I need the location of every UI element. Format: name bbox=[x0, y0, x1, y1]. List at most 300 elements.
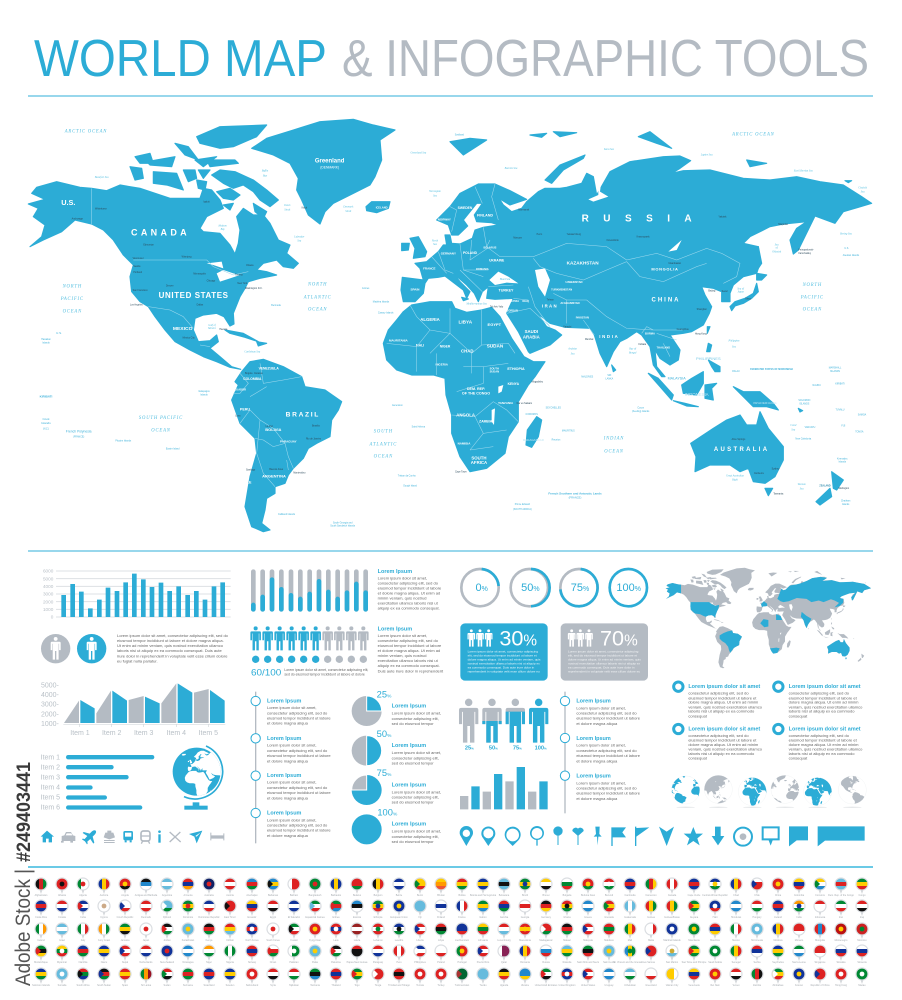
map borders and labels, Eurasia Africa Oceania: ISLANDS bbox=[799, 402, 810, 405]
flag row 5: Zambia bbox=[753, 984, 762, 987]
pie charts 25 50 75 100: 75% bbox=[377, 768, 392, 778]
timeline with three steps: Lorem Ipsum bbox=[576, 736, 611, 742]
timeline with four steps: consectetur adipiscing elit, sed do bbox=[267, 748, 328, 753]
four text items with ring bullets: consectetur adipiscing elit, sed do bbox=[789, 733, 850, 738]
area chart: Item 2 bbox=[102, 730, 121, 737]
flag row 1: Burkina Faso bbox=[581, 894, 596, 897]
flag row 1: Andorra bbox=[100, 894, 109, 897]
map country borders, Americas bbox=[92, 188, 302, 487]
flag row 1: Belgium bbox=[374, 894, 382, 897]
map borders and labels, Eurasia Africa Oceania: AFGHANISTAN bbox=[560, 301, 580, 305]
flag row 3: Mongolia bbox=[815, 939, 826, 942]
map labels, Americas: KIRIBATI bbox=[40, 394, 53, 398]
area chart: Item 1 bbox=[70, 730, 90, 737]
map borders and labels, Eurasia Africa Oceania: Tehran bbox=[547, 299, 554, 302]
flag row 5: Solomon Islands bbox=[32, 984, 51, 987]
map borders and labels, Eurasia Africa Oceania: Wellington bbox=[838, 487, 850, 490]
map labels, Americas: Islands bbox=[41, 421, 51, 425]
icon row: home car plane ship bus train info cutlery send bed bbox=[41, 830, 224, 844]
flag row 1: Australia bbox=[204, 894, 214, 897]
flag row 5: Macau bbox=[858, 984, 866, 987]
flag row 5: Syria bbox=[270, 984, 276, 987]
callout: 70 percent: Lorem ipsum dolor sit amet, consectetur adipiscing bbox=[568, 649, 639, 653]
flag row 5: Suriname bbox=[183, 984, 194, 987]
flag row 1: Barbados bbox=[331, 894, 342, 897]
map borders and labels, Eurasia Africa Oceania: AFRICA bbox=[471, 460, 488, 465]
timeline with three steps: Lorem Ipsum bbox=[576, 774, 611, 780]
map borders and labels, Eurasia Africa Oceania: NORWAY bbox=[438, 218, 451, 222]
map labels, Americas: Mexico bbox=[207, 327, 217, 330]
timeline with four steps: Lorem Ipsum bbox=[267, 698, 302, 704]
map borders and labels, Eurasia Africa Oceania: Reunion bbox=[552, 440, 561, 442]
text block: tube chart notes: aliquip ex ea commodo consequat. bbox=[378, 606, 440, 611]
map borders and labels, Eurasia Africa Oceania: North bbox=[431, 240, 439, 243]
flag row 5: Tunisia bbox=[416, 984, 424, 987]
map borders and labels, Eurasia Africa Oceania: Yakutsk bbox=[718, 215, 727, 218]
map borders and labels, Eurasia Africa Oceania: OF THE CONGO bbox=[462, 392, 490, 396]
flag row 5: Ukraine bbox=[521, 984, 530, 987]
flag row 5: Tajikistan bbox=[289, 984, 300, 987]
flag row 3: North Korea bbox=[246, 939, 259, 942]
flag row 3: Japan bbox=[143, 939, 150, 942]
flag row 3: Lesotho bbox=[395, 939, 404, 942]
flag row 1: Bahamas bbox=[268, 894, 279, 897]
map borders and labels, Eurasia Africa Oceania: Mogadishu bbox=[532, 382, 544, 384]
map borders and labels, Eurasia Africa Oceania: NORTH bbox=[802, 283, 822, 288]
map borders and labels, Eurasia Africa Oceania: FIJI bbox=[841, 426, 846, 428]
map labels, Americas: Lima bbox=[235, 416, 241, 418]
flag row 4: Russia bbox=[542, 961, 550, 964]
flag row 3: Kiribati bbox=[226, 939, 234, 942]
timeline with four steps: eiusmod tempor incididunt ut labore bbox=[267, 715, 331, 720]
flag row 3: Mali bbox=[628, 939, 633, 942]
map borders and labels, Eurasia Africa Oceania: ZAMBIA bbox=[479, 420, 493, 424]
map labels, Americas: Iqaluit bbox=[203, 200, 210, 203]
area chart: Item 3 bbox=[134, 730, 153, 737]
map labels, Americas: (DENMARK) bbox=[320, 166, 339, 170]
map labels, Americas: ARCTIC OCEAN bbox=[64, 129, 107, 134]
map borders and labels, Eurasia Africa Oceania: ANGOLA bbox=[456, 413, 476, 418]
map labels, Americas: COLOMBIA bbox=[243, 377, 262, 381]
map borders and labels, Eurasia Africa Oceania: MALDIVES bbox=[581, 375, 594, 378]
map labels, Americas: French Polynesia bbox=[66, 430, 92, 434]
horizontal bars bbox=[41, 754, 154, 812]
map labels, Americas: Saint Helena bbox=[412, 426, 426, 429]
map borders and labels, Eurasia Africa Oceania: Black Sea bbox=[500, 278, 511, 281]
map borders and labels, Eurasia Africa Oceania: French Southern and Antarctic Lands bbox=[548, 491, 602, 495]
four text items with ring bullets: veniam, quis nostrud exercitation ullamco bbox=[688, 747, 763, 752]
map labels, Americas: Whitehorse bbox=[95, 207, 107, 210]
people percentages: 75% bbox=[513, 746, 522, 752]
four text items with ring bullets: Lorem ipsum dolor sit amet bbox=[789, 726, 861, 732]
area chart: 5000- bbox=[41, 682, 60, 689]
four text items with ring bullets: laboris nisi ut aliquip ex ea commodo bbox=[789, 709, 855, 714]
map borders and labels, Eurasia Africa Oceania: Hong Kong bbox=[695, 333, 707, 335]
map labels, Americas: Vancouver bbox=[133, 257, 144, 260]
map borders and labels, Eurasia Africa Oceania: CHAD bbox=[461, 349, 474, 354]
map borders and labels, Eurasia Africa Oceania: INDONESIA bbox=[685, 392, 709, 397]
flag row 2: Germany bbox=[541, 916, 552, 919]
flag row 4: St. Vincent and the Grenadines bbox=[613, 961, 647, 964]
map borders and labels, Eurasia Africa Oceania: LANKA bbox=[606, 377, 614, 380]
text block: pictogram notes: Lorem Ipsum bbox=[378, 626, 412, 632]
map labels, Americas: Gough Island bbox=[403, 486, 418, 488]
map borders and labels, Eurasia Africa Oceania: Tasmania bbox=[773, 493, 784, 495]
map labels, Americas: Easter Island bbox=[166, 447, 180, 450]
flag row 2: Dominican Republic bbox=[198, 916, 220, 919]
map labels, Americas: U.S. bbox=[61, 198, 75, 207]
map borders and labels, Eurasia Africa Oceania: ISLANDS bbox=[830, 370, 840, 373]
text block: tube chart notes: Lorem ipsum dolor sit amet, bbox=[378, 576, 427, 581]
map borders and labels, Eurasia Africa Oceania: SUDAN bbox=[490, 370, 499, 374]
flag row 4: Norway bbox=[248, 961, 257, 964]
flag row 1: Benin bbox=[417, 894, 424, 897]
flag row 4 bbox=[34, 944, 869, 964]
callout: 30 percent: reprehenderit in voluptate velit esse cillum dolore eu bbox=[468, 669, 540, 673]
map borders and labels, Eurasia Africa Oceania: FEDERATED STATES OF MICRONESIA bbox=[750, 368, 793, 371]
map labels, Americas: Canary Islands bbox=[378, 311, 394, 314]
pie charts 25 50 75 100: sed do eiusmod tempor bbox=[392, 760, 434, 765]
flag row 3: Kenya bbox=[206, 939, 213, 942]
map labels, Americas: Beaufort Sea bbox=[95, 176, 109, 179]
flag row 2: Denmark bbox=[141, 916, 152, 919]
flag row 1: Austria bbox=[226, 894, 234, 897]
flag row 4: San Marino bbox=[666, 961, 679, 964]
flag row 2: India bbox=[796, 916, 802, 919]
map borders and labels, Eurasia Africa Oceania: Sea bbox=[861, 191, 865, 194]
map labels, Americas: VENEZUELA bbox=[259, 366, 279, 370]
flag row 1: Angola bbox=[121, 894, 129, 897]
map labels, Americas: MEXICO bbox=[173, 326, 193, 332]
flag row 5: Vatican City bbox=[666, 984, 679, 987]
pictogram people row 60/100 bbox=[250, 626, 369, 678]
flag row 3: Moldova bbox=[773, 939, 783, 942]
map borders and labels, Eurasia Africa Oceania: TURKEY bbox=[498, 289, 514, 293]
map borders and labels, Eurasia Africa Oceania: NEW bbox=[822, 482, 829, 484]
map borders and labels, Eurasia Africa Oceania: TONGA bbox=[855, 431, 864, 434]
tube chart bbox=[253, 572, 366, 609]
map labels, Americas: Minneapolis bbox=[193, 274, 207, 276]
text block: irure dolor in reprehenderit in voluptate velit esse cillum dolore bbox=[117, 653, 228, 658]
map labels, Americas: Davis bbox=[283, 204, 290, 207]
callout: 70 percent: nostrud exercitation ullamco laboris nisi ut aliquip ex bbox=[568, 661, 641, 665]
flag row 4: Saint Lucia bbox=[603, 961, 616, 964]
flag row 3: Ivory Coast bbox=[98, 939, 110, 942]
map borders and labels, Eurasia Africa Oceania: MAURITIUS bbox=[562, 430, 575, 433]
map borders and labels, Eurasia Africa Oceania: UKRAINE bbox=[489, 258, 505, 262]
map borders and labels, Eurasia Africa Oceania: Alice Springs bbox=[732, 438, 746, 441]
map labels, Americas: Havana bbox=[219, 329, 228, 331]
flag row 4: Myanmar bbox=[57, 961, 67, 964]
map borders and labels, Eurasia Africa Oceania: Sydney bbox=[772, 468, 780, 470]
map labels, Americas: Bogota bbox=[245, 372, 253, 375]
flag row 5: Turkey bbox=[437, 984, 445, 987]
flag row 5: Venezuela bbox=[688, 984, 700, 987]
map borders and labels, Eurasia Africa Oceania: PALAU bbox=[732, 370, 740, 373]
flag row 2: Eritrea bbox=[332, 916, 340, 919]
map borders and labels, Eurasia Africa Oceania: Petropavlovsk- bbox=[798, 249, 814, 252]
flag row 1: Cameroon bbox=[645, 894, 657, 897]
map borders and labels, Eurasia Africa Oceania: KIRIBATI bbox=[835, 383, 845, 386]
pie charts 25 50 75 100: Lorem ipsum dolor sit amet, bbox=[392, 711, 441, 716]
column chart bbox=[460, 767, 548, 809]
four text items with ring bullets: dolore magna aliqua. Ut enim ad minim bbox=[789, 700, 859, 705]
four text items with ring bullets: consequat bbox=[688, 713, 708, 718]
map labels, Americas: Los Angeles bbox=[130, 303, 144, 306]
text block: tube chart notes: exercitation ullamco laboris nisi ut bbox=[378, 601, 439, 606]
flag row 4: Serbia bbox=[754, 961, 761, 964]
map borders and labels, Eurasia Africa Oceania: Chatham bbox=[841, 500, 850, 503]
map labels, Americas: Santiago bbox=[246, 469, 256, 472]
flag row 3: Maldives bbox=[604, 939, 615, 942]
flag row 3: Mexico bbox=[732, 939, 740, 942]
flag row 4: Nigeria bbox=[226, 961, 234, 964]
pictogram people row 60/100: 60/100 bbox=[251, 668, 281, 678]
map labels, Americas: Denver bbox=[166, 285, 174, 288]
four text items with ring bullets: consectetur adipiscing elit, sed do bbox=[688, 691, 749, 696]
flag row 3: Latvia bbox=[354, 939, 361, 942]
pictogram people row 60/100: sed do eiusmod tempor incididunt ut labore et dolore bbox=[284, 672, 365, 676]
map borders and labels, Eurasia Africa Oceania: Islands bbox=[842, 504, 850, 506]
map borders and labels, Eurasia Africa Oceania: THAILAND bbox=[657, 345, 670, 349]
map borders and labels, Eurasia Africa Oceania: Mumbai bbox=[585, 339, 594, 341]
timeline with four steps: et dolore magna aliqua bbox=[267, 795, 309, 800]
map borders and labels, Eurasia Africa Oceania: SEYCHELLES bbox=[546, 407, 561, 409]
callout: 30 percent: Lorem ipsum dolor sit amet, consectetur adipiscing bbox=[468, 649, 538, 653]
map borders and labels, Eurasia Africa Oceania: FINLAND bbox=[477, 214, 493, 218]
map labels, Americas: BRAZIL bbox=[286, 412, 318, 419]
map labels, Americas: OCEAN bbox=[63, 309, 82, 314]
map borders and labels, Eurasia Africa Oceania: Tel Aviv-Yafo bbox=[490, 305, 504, 308]
map labels, Americas: Rio de Janeiro bbox=[306, 437, 322, 440]
flag row 1: Dem. Rep. of the Congo bbox=[828, 894, 855, 897]
flag row 5: Tuvalu bbox=[479, 984, 487, 987]
flag row 2: Czech Republic bbox=[117, 916, 134, 919]
timeline with four steps: eiusmod tempor incididunt ut labore bbox=[267, 828, 331, 833]
text block: pictogram notes: Lorem ipsum dolor sit amet, bbox=[378, 633, 427, 638]
flag row 2: Georgia bbox=[521, 916, 530, 919]
flag row 2: Cyprus bbox=[100, 916, 109, 919]
map labels, Americas: Madeira Islands bbox=[373, 300, 390, 303]
four text items with ring bullets: dolore magna aliqua. Ut enim ad minim bbox=[688, 700, 759, 705]
flag row 3: Italy bbox=[81, 939, 86, 942]
flag row 2: Egypt bbox=[270, 916, 276, 919]
four text items with ring bullets: consequat bbox=[789, 713, 808, 718]
four text items with ring bullets: eiusmod tempor incididunt ut labore et bbox=[688, 738, 757, 743]
flag row 5: Turkmenistan bbox=[455, 984, 470, 987]
flag row 2: Finland bbox=[437, 916, 446, 919]
map labels, Americas: PARAGUAY bbox=[280, 440, 297, 444]
map borders and labels, Eurasia Africa Oceania: Dar es Salaam bbox=[517, 402, 532, 405]
flag row 1: Antigua and Barbuda bbox=[135, 894, 158, 897]
four text items with ring bullets: Lorem ipsum dolor sit amet bbox=[688, 684, 760, 690]
map labels, Americas: SOUTH PACIFIC bbox=[139, 416, 183, 421]
map labels, Americas: Gulf of bbox=[208, 324, 217, 327]
flag row 1: Comoros bbox=[815, 894, 826, 897]
flag row 1: Belarus bbox=[353, 894, 362, 897]
timeline with four steps: Lorem ipsum dolor sit amet, bbox=[267, 743, 317, 748]
map borders and labels, Eurasia Africa Oceania: SWEDEN bbox=[458, 206, 473, 210]
flag row 5: Tanzania bbox=[310, 984, 320, 987]
flag row 1: Albania bbox=[58, 894, 67, 897]
flag row 4: Nepal bbox=[122, 961, 129, 964]
flag row 2: Honduras bbox=[731, 916, 742, 919]
map borders and labels, Eurasia Africa Oceania bbox=[387, 133, 867, 511]
progress rings: 0% bbox=[476, 582, 488, 594]
map labels, Americas: NIGER bbox=[440, 345, 451, 349]
map labels, Americas: Brasilia bbox=[312, 424, 320, 427]
flag row 2: Equatorial Guinea bbox=[305, 916, 325, 919]
flag row 3: Jordan bbox=[163, 939, 171, 942]
map labels, Americas: Chicago bbox=[207, 280, 216, 282]
text block: pictogram notes: et dolore magna aliqua. Ut enim ad bbox=[378, 648, 440, 653]
map labels, Americas: Azores bbox=[362, 287, 370, 290]
pie charts 25 50 75 100: consectetur adipiscing elit, bbox=[392, 834, 439, 839]
flag row 3: Marshall Islands bbox=[663, 939, 681, 942]
flag row 2: Iceland bbox=[774, 916, 783, 919]
timeline with three steps: eiusmod tempor incididunt ut labore bbox=[576, 753, 641, 758]
flag row 5: Sweden bbox=[226, 984, 235, 987]
flag row 4: Sierra Leone bbox=[792, 961, 807, 964]
map borders and labels, Eurasia Africa Oceania: Novosibirsk bbox=[607, 239, 620, 242]
flag row 1: Afghanistan bbox=[35, 894, 48, 897]
map labels, Americas: CHILE bbox=[241, 480, 252, 484]
timeline with four steps: Lorem ipsum dolor sit amet, bbox=[267, 817, 317, 822]
map borders and labels, Eurasia Africa Oceania: (SOUTH AFRICA) bbox=[513, 508, 532, 511]
map borders and labels, Eurasia Africa Oceania: Bering Sea bbox=[840, 232, 853, 235]
map borders and labels, Eurasia Africa Oceania: EGYPT bbox=[488, 322, 502, 327]
flag row 4: Pakistan bbox=[289, 961, 299, 964]
map labels, Americas: ECUADOR bbox=[233, 387, 246, 391]
timeline with four steps: eiusmod tempor incididunt ut labore bbox=[267, 790, 331, 795]
callout: 30 percent: elit, sed do eiusmod tempor incididunt ut labore et bbox=[468, 653, 537, 657]
horizontal bars: Item 4 bbox=[41, 785, 60, 792]
map borders and labels, Eurasia Africa Oceania: RUSSIA bbox=[582, 214, 692, 225]
flag row 4: Oman bbox=[270, 961, 277, 964]
text block: pictogram notes bbox=[378, 626, 444, 673]
map borders and labels, Eurasia Africa Oceania: NAURU bbox=[813, 384, 821, 387]
map borders and labels, Eurasia Africa Oceania: KENYA bbox=[508, 382, 520, 386]
flag row 2: Guatemala bbox=[624, 916, 637, 919]
map borders and labels, Eurasia Africa Oceania: Okhotsk bbox=[772, 250, 782, 253]
flag markers grid bbox=[32, 877, 869, 987]
flag row 2: Haiti bbox=[713, 916, 718, 919]
four text items with ring bullets: Lorem ipsum dolor sit amet bbox=[688, 726, 760, 732]
flag row 2: Guyana bbox=[690, 916, 699, 919]
map borders and labels, Eurasia Africa Oceania: NAMIBIA bbox=[458, 441, 471, 445]
map borders and labels, Eurasia Africa Oceania: Murmansk bbox=[518, 209, 530, 212]
bar chart: 6000 bbox=[43, 569, 54, 574]
flag row 2: El Salvador bbox=[288, 916, 300, 919]
map borders and labels, Eurasia Africa Oceania: Sea bbox=[433, 243, 438, 246]
flag row 4: Netherlands bbox=[140, 961, 153, 964]
flag row 3: Luxembourg bbox=[497, 939, 511, 942]
four text items with ring bullets: consectetur adipiscing elit, sed do bbox=[688, 733, 749, 738]
horizontal bars: Item 5 bbox=[41, 795, 60, 802]
map labels, Americas: Caracas bbox=[254, 372, 264, 375]
flag row 1: Colombia bbox=[794, 894, 805, 897]
stock id side text: #249403441 bbox=[14, 762, 35, 862]
flag row 4: Saint Kitts and Nevis bbox=[577, 961, 600, 964]
four text items with ring bullets: eiusmod tempor incididunt ut labore et bbox=[688, 695, 757, 700]
pie charts 25 50 75 100 bbox=[352, 690, 441, 844]
flag row 4: Singapore bbox=[815, 961, 826, 964]
map borders and labels, Eurasia Africa Oceania: SRI bbox=[607, 375, 612, 377]
flag row 1: Armenia bbox=[184, 894, 193, 897]
timeline with three steps: et dolore magna aliqua bbox=[576, 721, 618, 726]
map borders and labels, Eurasia Africa Oceania: Karachi bbox=[563, 326, 572, 329]
flag row 4: Qatar bbox=[501, 961, 507, 964]
pie charts 25 50 75 100: Lorem ipsum dolor sit amet, bbox=[392, 750, 441, 755]
progress rings bbox=[461, 569, 647, 606]
flag row 5: Trinidad and Tobago bbox=[388, 984, 410, 987]
flag row 3: Morocco bbox=[857, 939, 867, 942]
timeline with four steps: consectetur adipiscing elit, sed do bbox=[267, 710, 328, 715]
four text items with ring bullets: veniam, quis nostrud exercitation ullamco bbox=[688, 704, 763, 709]
map borders and labels, Eurasia Africa Oceania: MARSHALL bbox=[829, 367, 842, 370]
flag row 2: France bbox=[458, 916, 466, 919]
map labels, Americas: OCEAN bbox=[308, 308, 327, 313]
bar chart: 3000 bbox=[43, 592, 54, 597]
map labels, Americas: Portland bbox=[133, 271, 143, 274]
map pins and markers row bbox=[460, 826, 865, 846]
map borders and labels, Eurasia Africa Oceania: Chukchi bbox=[858, 187, 867, 190]
map labels, Americas: Seattle bbox=[133, 265, 141, 268]
flag row 2: Hungary bbox=[752, 916, 762, 919]
flag row 1: Chad bbox=[733, 894, 740, 897]
people percentages: 25% bbox=[465, 746, 474, 752]
pie charts 25 50 75 100: sed do eiusmod tempor bbox=[392, 839, 434, 844]
flag row 1: Canada bbox=[668, 894, 677, 897]
area chart: 3000- bbox=[41, 702, 60, 709]
horizontal bars: Item 1 bbox=[41, 754, 60, 761]
flag row 5: Uruguay bbox=[604, 984, 614, 987]
flag row 5: Sri Lanka bbox=[141, 984, 152, 987]
map labels, Americas: UNITED STATES bbox=[159, 291, 229, 300]
title: WORLD MAP bbox=[34, 30, 327, 88]
map labels, Americas: Baffin bbox=[262, 169, 269, 172]
pie charts 25 50 75 100: consectetur adipiscing elit, bbox=[392, 755, 439, 760]
pie charts 25 50 75 100: sed do eiusmod tempor bbox=[392, 721, 434, 726]
flag row 1: Brazil bbox=[522, 894, 528, 897]
timeline with four steps: Lorem Ipsum bbox=[267, 773, 302, 779]
callout: 70 percent: elit, sed do eiusmod tempor incididunt ut labore et bbox=[568, 653, 637, 657]
map labels, Americas: Sea bbox=[297, 239, 302, 242]
map labels, Americas: CANADA bbox=[131, 228, 187, 238]
flag row 4: Mozambique bbox=[34, 961, 49, 964]
text block: pictogram notes: consectetur adipiscing elit, sed do bbox=[378, 638, 439, 643]
flag row 3: Kyrgyzstan bbox=[309, 939, 322, 942]
flag row 3: Malaysia bbox=[583, 939, 593, 942]
map labels, Americas: NORTH bbox=[307, 283, 327, 288]
flag row 3: Lebanon bbox=[373, 939, 383, 942]
flag row 4: Puerto Rico bbox=[477, 961, 490, 964]
map labels, Americas: U.S. bbox=[56, 331, 62, 335]
flag row 5: Sudan bbox=[164, 984, 171, 987]
map labels, Americas: Winnipeg bbox=[182, 256, 192, 258]
flag row 2: Croatia bbox=[58, 916, 67, 919]
flag row 2: Indonesia bbox=[815, 916, 826, 919]
map borders and labels, Eurasia Africa Oceania: CHINA bbox=[652, 298, 680, 304]
map labels, Americas: ALGERIA bbox=[420, 317, 441, 322]
map borders and labels, Eurasia Africa Oceania: Seoul bbox=[722, 291, 728, 293]
map borders and labels, Eurasia Africa Oceania: UZBEKISTAN bbox=[566, 280, 583, 284]
flag row 5: South Sudan bbox=[97, 984, 112, 987]
map labels, Americas: PERU bbox=[240, 408, 250, 412]
map labels, Americas: Bay bbox=[221, 228, 226, 231]
map borders and labels, Eurasia Africa Oceania: Yekaterinburg bbox=[567, 233, 582, 236]
map borders and labels, Eurasia Africa Oceania: Sea bbox=[732, 346, 737, 349]
